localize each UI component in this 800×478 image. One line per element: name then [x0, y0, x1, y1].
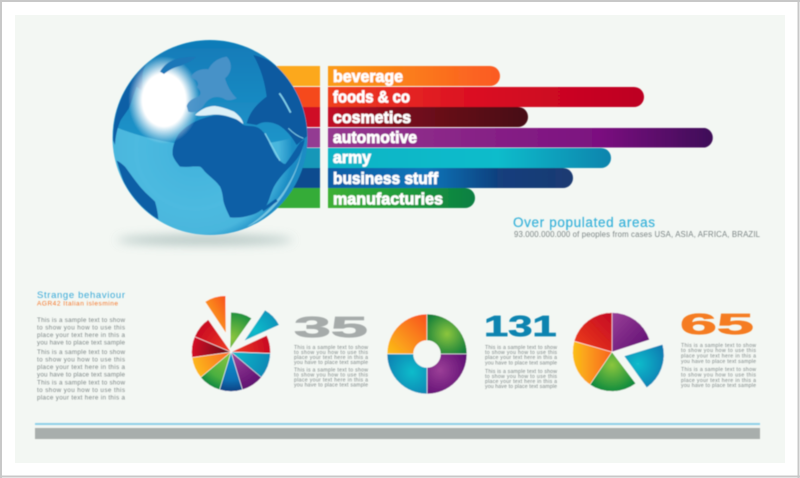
- bar: automotive: [328, 128, 713, 148]
- text block: column 65: to show you how to use this: [681, 372, 756, 378]
- gloss highlight: [128, 56, 200, 144]
- bar: business stuff: [328, 168, 573, 188]
- bar: army: [328, 148, 611, 168]
- bar: army: army: [333, 149, 372, 167]
- text block: left column: This is a sample text to show: [37, 380, 125, 386]
- text block: column 35: place your text here in this a: [294, 378, 368, 384]
- text block: column 35: you have to place text sample: [294, 360, 368, 366]
- upper dome of the globe: [114, 40, 290, 144]
- text block: column 35: [294, 345, 368, 388]
- Red sea and lakes: [265, 133, 280, 161]
- text block: column 131: This is a sample text to show: [485, 369, 557, 375]
- text block: column 131: This is a sample text to show: [485, 345, 557, 351]
- bar: beverage: [328, 66, 500, 86]
- text block: column 131: you have to place text sample: [485, 360, 557, 366]
- number: 65: 65: [680, 308, 754, 340]
- colour stubs behind globe: [270, 66, 320, 208]
- text block: column 131: to show you how to use this: [485, 374, 557, 380]
- bar: business stuff: business stuff: [333, 170, 438, 188]
- text block: column 65: This is a sample text to show: [681, 367, 756, 373]
- South America: [117, 161, 158, 219]
- text block: column 65: you have to place text sample: [681, 359, 756, 365]
- text block: column 65: This is a sample text to show: [681, 343, 756, 349]
- pie chart: exploded teal slice: [572, 312, 664, 391]
- text block: left column: place your text here in this a: [37, 332, 125, 339]
- subheading: orange line: AGR42 Italian islesmine: [37, 300, 118, 308]
- bar chart: categories: [328, 66, 713, 208]
- text block: column 35: This is a sample text to show: [294, 345, 368, 351]
- donut chart: [387, 314, 467, 394]
- Europe: [187, 57, 237, 112]
- text block: column 35: place your text here in this a: [294, 355, 368, 361]
- text block: left column: This is a sample text to show: [37, 317, 125, 324]
- globe: [112, 39, 308, 236]
- text block: column 65: [681, 343, 756, 389]
- North America: [112, 66, 146, 145]
- text block: left column: to show you how to use this: [37, 324, 125, 332]
- text block: column 65: place your text here in this a: [681, 378, 756, 384]
- bar: beverage: beverage: [333, 68, 403, 86]
- bar: cosmetics: cosmetics: [333, 109, 411, 127]
- Greenland: [160, 59, 190, 74]
- heading: over populated areas: Over populated areas: [513, 215, 655, 230]
- text block: left column: to show you how to use this: [37, 356, 125, 364]
- text block: column 65: to show you how to use this: [681, 348, 756, 354]
- caption: over populated areas: 93.000.000.000 of peoples from cases USA, ASIA, AFRICA, BRAZIL: [514, 230, 761, 239]
- number: 131: 131: [484, 310, 557, 343]
- text block: column 131: you have to place text sample: [485, 384, 557, 390]
- footer band: [35, 423, 760, 439]
- text block: column 65: you have to place text sample: [681, 383, 756, 389]
- number: 35: 35: [294, 311, 368, 343]
- text block: column 35: you have to place text sample: [294, 382, 368, 388]
- text block: left column: This is a sample text to show: [37, 349, 125, 356]
- text block: left column: you have to place text sample: [37, 340, 125, 346]
- text block: column 131: place your text here in this a: [485, 355, 557, 361]
- text block: column 35: to show you how to use this: [294, 372, 368, 378]
- bar: foods & co: foods & co: [333, 88, 410, 106]
- bar: foods & co: [328, 87, 644, 107]
- Asia and Middle East: [247, 55, 311, 145]
- text block: column 131: place your text here in this a: [485, 379, 557, 385]
- text block: left column: [37, 317, 125, 402]
- pie chart: many slices: [192, 296, 279, 392]
- text block: left column: place your text here in this a: [37, 394, 125, 402]
- bar: automotive: automotive: [333, 129, 417, 147]
- text block: column 131: to show you how to use this: [485, 350, 557, 356]
- text block: column 65: place your text here in this a: [681, 354, 756, 360]
- Mediterranean highlight: [195, 106, 243, 124]
- text block: column 35: This is a sample text to show: [294, 368, 368, 374]
- heading: strange behaviour: Strange behaviour: [37, 290, 125, 301]
- text block: column 131: [485, 345, 557, 390]
- bar: cosmetics: [328, 107, 528, 127]
- bar: manufacturies: manufacturies: [333, 190, 443, 208]
- bar: manufacturies: [328, 188, 475, 208]
- Madagascar: [263, 200, 277, 210]
- text block: column 35: to show you how to use this: [294, 350, 368, 356]
- text block: left column: you have to place text sample: [37, 372, 125, 378]
- globe ground shadow: [117, 235, 293, 245]
- text block: left column: to show you how to use this: [37, 387, 125, 394]
- text block: left column: place your text here in this a: [37, 364, 125, 371]
- Africa: [173, 115, 305, 218]
- lower right pale ocean: [247, 140, 304, 227]
